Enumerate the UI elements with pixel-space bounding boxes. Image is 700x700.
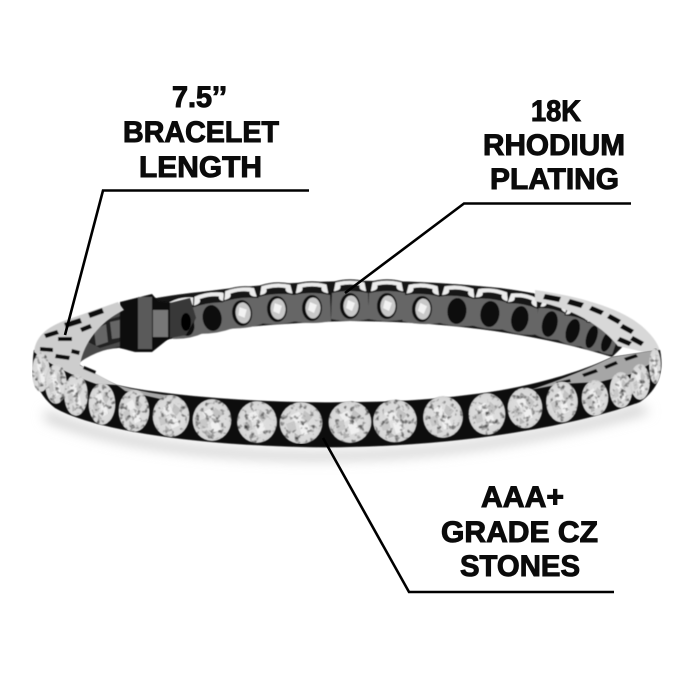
leader line: bracelet length: [65, 190, 309, 335]
front band backing: [33, 350, 661, 447]
right end links: [535, 290, 661, 356]
callout text: rhodium plating: PLATING: [490, 163, 619, 196]
bracelet shadow: [45, 405, 650, 460]
callout text: bracelet length: LENGTH: [139, 151, 262, 184]
callout text: rhodium plating: [483, 95, 625, 196]
callout text: bracelet length: [123, 81, 279, 184]
callout: rhodium plating: [345, 95, 631, 293]
callout: stone grade: [323, 438, 614, 592]
callout text: bracelet length: BRACELET: [123, 116, 279, 149]
callout text: stone grade: [441, 481, 598, 583]
callout text: rhodium plating: 18K: [531, 95, 582, 128]
cubic zirconia stones: [32, 348, 661, 444]
back links of bracelet: [70, 280, 661, 362]
front side top prongs: [117, 350, 657, 399]
left back links: [78, 305, 140, 362]
callout text: stone grade: STONES: [460, 550, 580, 583]
leader line: stone grade: [323, 438, 614, 592]
callout text: bracelet length: 7.5’’: [172, 81, 227, 114]
callout text: stone grade: GRADE CZ: [441, 516, 598, 549]
bracelet illustration: [32, 280, 661, 460]
callout text: stone grade: AAA+: [481, 481, 564, 514]
left end prongs: [34, 302, 124, 385]
clasp: [120, 294, 196, 352]
leader line: rhodium plating: [345, 204, 631, 293]
callout text: rhodium plating: RHODIUM: [483, 129, 625, 162]
callout: bracelet length: [65, 81, 309, 335]
